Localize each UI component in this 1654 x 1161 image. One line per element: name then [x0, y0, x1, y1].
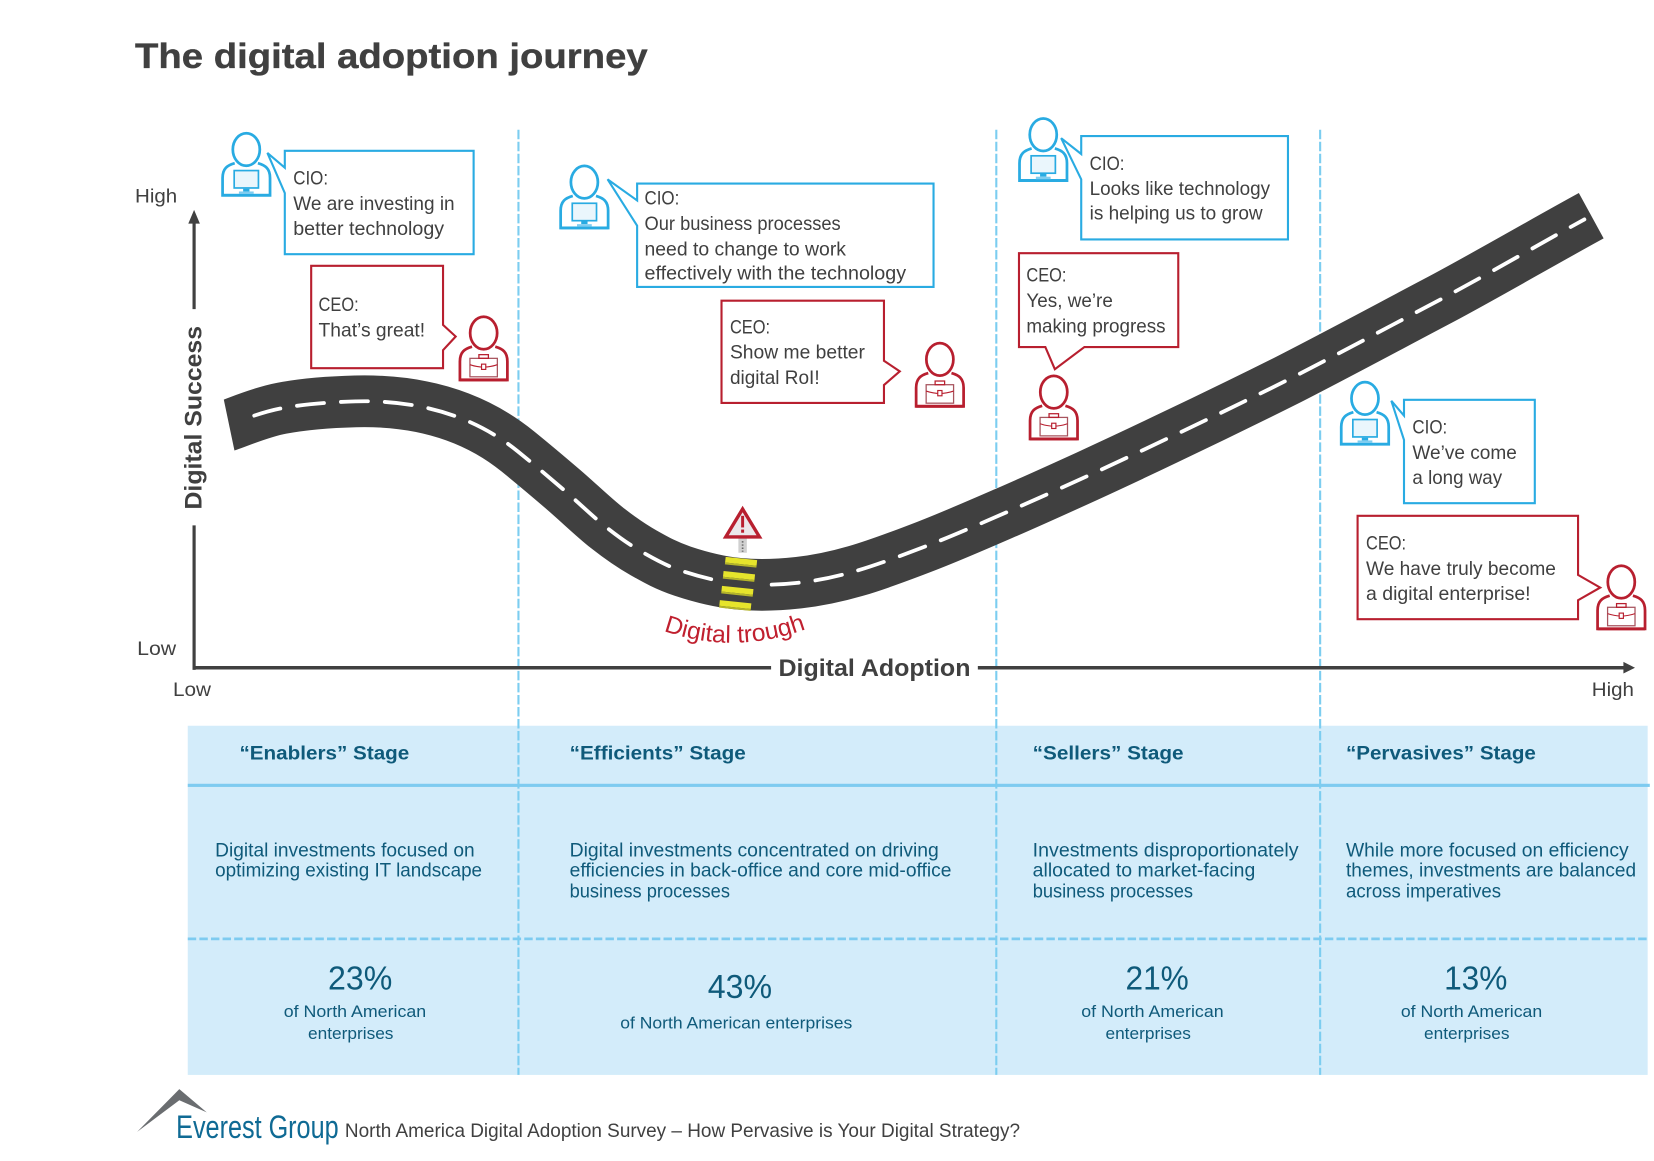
bubble text: We’ve come — [1412, 443, 1517, 464]
bubble text: We are investing in — [293, 194, 455, 215]
y axis arrow — [188, 210, 200, 670]
bubble text — [1026, 266, 1166, 337]
stat caption: of North American — [1401, 1002, 1542, 1021]
stage description: allocated to market-facing — [1033, 861, 1255, 882]
title: The digital adoption journey — [135, 37, 648, 76]
speech bubble — [267, 151, 474, 254]
x axis high label: High — [1592, 679, 1634, 701]
panel: stage table background — [188, 726, 1650, 1075]
speed bumps — [717, 557, 765, 611]
speech bubble — [1358, 516, 1600, 619]
icon: CIO person — [1341, 382, 1389, 445]
bubble text: CIO: — [293, 169, 328, 190]
stage description: While more focused on efficiency — [1346, 841, 1629, 862]
source line: North America Digital Adoption Survey – How Pervasive is Your Digital Strategy? — [345, 1121, 1020, 1142]
icon: CEO person — [460, 317, 507, 381]
speech bubble — [608, 179, 934, 287]
bubble text: CEO: — [730, 317, 770, 338]
bubble text — [1412, 418, 1517, 489]
bubble text: Looks like technology — [1090, 179, 1271, 200]
stage description: business processes — [1033, 882, 1193, 903]
y axis low label: Low — [137, 638, 177, 660]
bubble text: CIO: — [1090, 154, 1124, 175]
bubble text — [730, 317, 865, 389]
bubble text: We have truly become — [1366, 559, 1556, 580]
stat: 23%: 23% — [328, 959, 392, 997]
bubble text: effectively with the technology — [645, 264, 907, 285]
dialogue: efficients CIO — [561, 166, 934, 287]
bubble text — [645, 189, 907, 285]
bubble text: CEO: — [1026, 266, 1066, 287]
x axis arrow — [193, 662, 1635, 674]
speech bubble — [722, 301, 900, 403]
stat caption: enterprises — [308, 1024, 393, 1043]
dialogue: sellers CEO — [1019, 253, 1178, 440]
stat caption: of North American — [1081, 1002, 1224, 1021]
bubble text: CEO: — [1366, 534, 1406, 555]
icon: CEO person — [916, 343, 964, 408]
stage description: Investments disproportionately — [1033, 841, 1299, 862]
stage description — [1033, 841, 1299, 903]
stage description: optimizing existing IT landscape — [215, 861, 482, 882]
stage description: across imperatives — [1346, 882, 1501, 903]
label: digital trough: Digital trough — [666, 616, 804, 644]
chart: digital adoption axes — [135, 186, 1635, 701]
y axis title: Digital Success — [181, 326, 207, 510]
x axis title: Digital Adoption — [778, 655, 970, 682]
stat caption: of North American — [284, 1002, 426, 1021]
bubble text: a long way — [1412, 468, 1503, 489]
bubble text: digital RoI! — [730, 368, 820, 389]
stage description — [1346, 841, 1636, 903]
icon: CIO person — [223, 133, 270, 197]
stat caption — [1401, 1002, 1542, 1043]
stage description: themes, investments are balanced — [1346, 861, 1636, 882]
stage description: Digital investments focused on — [215, 841, 475, 862]
road curve — [209, 216, 1591, 585]
bubble text — [1366, 534, 1556, 605]
speech bubble — [1061, 136, 1288, 239]
bubble text: CIO: — [1412, 418, 1447, 439]
stage heading: “Sellers” Stage — [1033, 743, 1184, 765]
stage divider lines — [518, 130, 1320, 1075]
stage heading: “Pervasives” Stage — [1346, 743, 1536, 765]
bubble text: That’s great! — [319, 321, 425, 342]
bubble text: Show me better — [730, 343, 865, 364]
logo wordmark: Everest Group — [176, 1108, 339, 1145]
stat caption — [1081, 1002, 1224, 1043]
icon: Everest Group peak logo — [137, 1089, 207, 1132]
icon: CEO person — [1030, 376, 1078, 440]
footer — [137, 1089, 1020, 1145]
icon: warning sign — [726, 509, 759, 553]
bubble text: better technology — [293, 219, 445, 240]
stat caption: of North American enterprises — [620, 1014, 852, 1033]
dialogue: pervasives CIO — [1341, 382, 1535, 503]
dialogue: efficients CEO — [722, 301, 964, 408]
bubble text: a digital enterprise! — [1366, 584, 1531, 605]
bubble text — [319, 295, 425, 342]
stat: 43%: 43% — [708, 968, 772, 1006]
dialogue: sellers CIO — [1020, 118, 1288, 239]
bubble text: making progress — [1026, 316, 1166, 337]
stat caption: enterprises — [1105, 1024, 1191, 1043]
speech bubble — [311, 266, 456, 368]
icon: CEO person — [1598, 566, 1645, 630]
stat: 13%: 13% — [1444, 959, 1507, 997]
stage description: efficiencies in back-office and core mid-office — [570, 861, 951, 882]
stage heading: “Efficients” Stage — [570, 743, 746, 765]
bubble text: need to change to work — [645, 239, 847, 260]
dialogue: enablers CEO — [311, 266, 507, 381]
stage description: business processes — [570, 882, 730, 903]
stage description: Digital investments concentrated on driving — [570, 841, 939, 862]
stage description — [215, 841, 482, 882]
dialogue: pervasives CEO — [1358, 516, 1645, 630]
stat: 21%: 21% — [1126, 959, 1189, 997]
stage heading: “Enablers” Stage — [239, 743, 409, 765]
column: enablers stage — [215, 743, 482, 1043]
icon: CIO person — [561, 166, 608, 229]
stat caption — [284, 1002, 426, 1043]
dialogue: enablers CIO — [223, 133, 474, 254]
bubble text — [1090, 154, 1271, 224]
column: pervasives stage — [1346, 743, 1636, 1043]
speech bubble — [1391, 400, 1535, 503]
bubble text: CIO: — [645, 189, 679, 210]
column: sellers stage — [1033, 743, 1299, 1043]
bubble text — [293, 169, 455, 240]
bubble text: is helping us to grow — [1090, 203, 1263, 224]
stat caption: enterprises — [1424, 1024, 1509, 1043]
bubble text: CEO: — [319, 295, 359, 316]
column: efficients stage — [570, 743, 951, 1033]
icon: CIO person — [1020, 118, 1067, 182]
bubble text: Yes, we’re — [1026, 291, 1113, 312]
speech bubble — [1019, 253, 1178, 369]
y axis high label: High — [135, 186, 177, 208]
x axis low label: Low — [173, 679, 212, 701]
stage description — [570, 841, 951, 903]
bubble text: Our business processes — [645, 214, 841, 235]
